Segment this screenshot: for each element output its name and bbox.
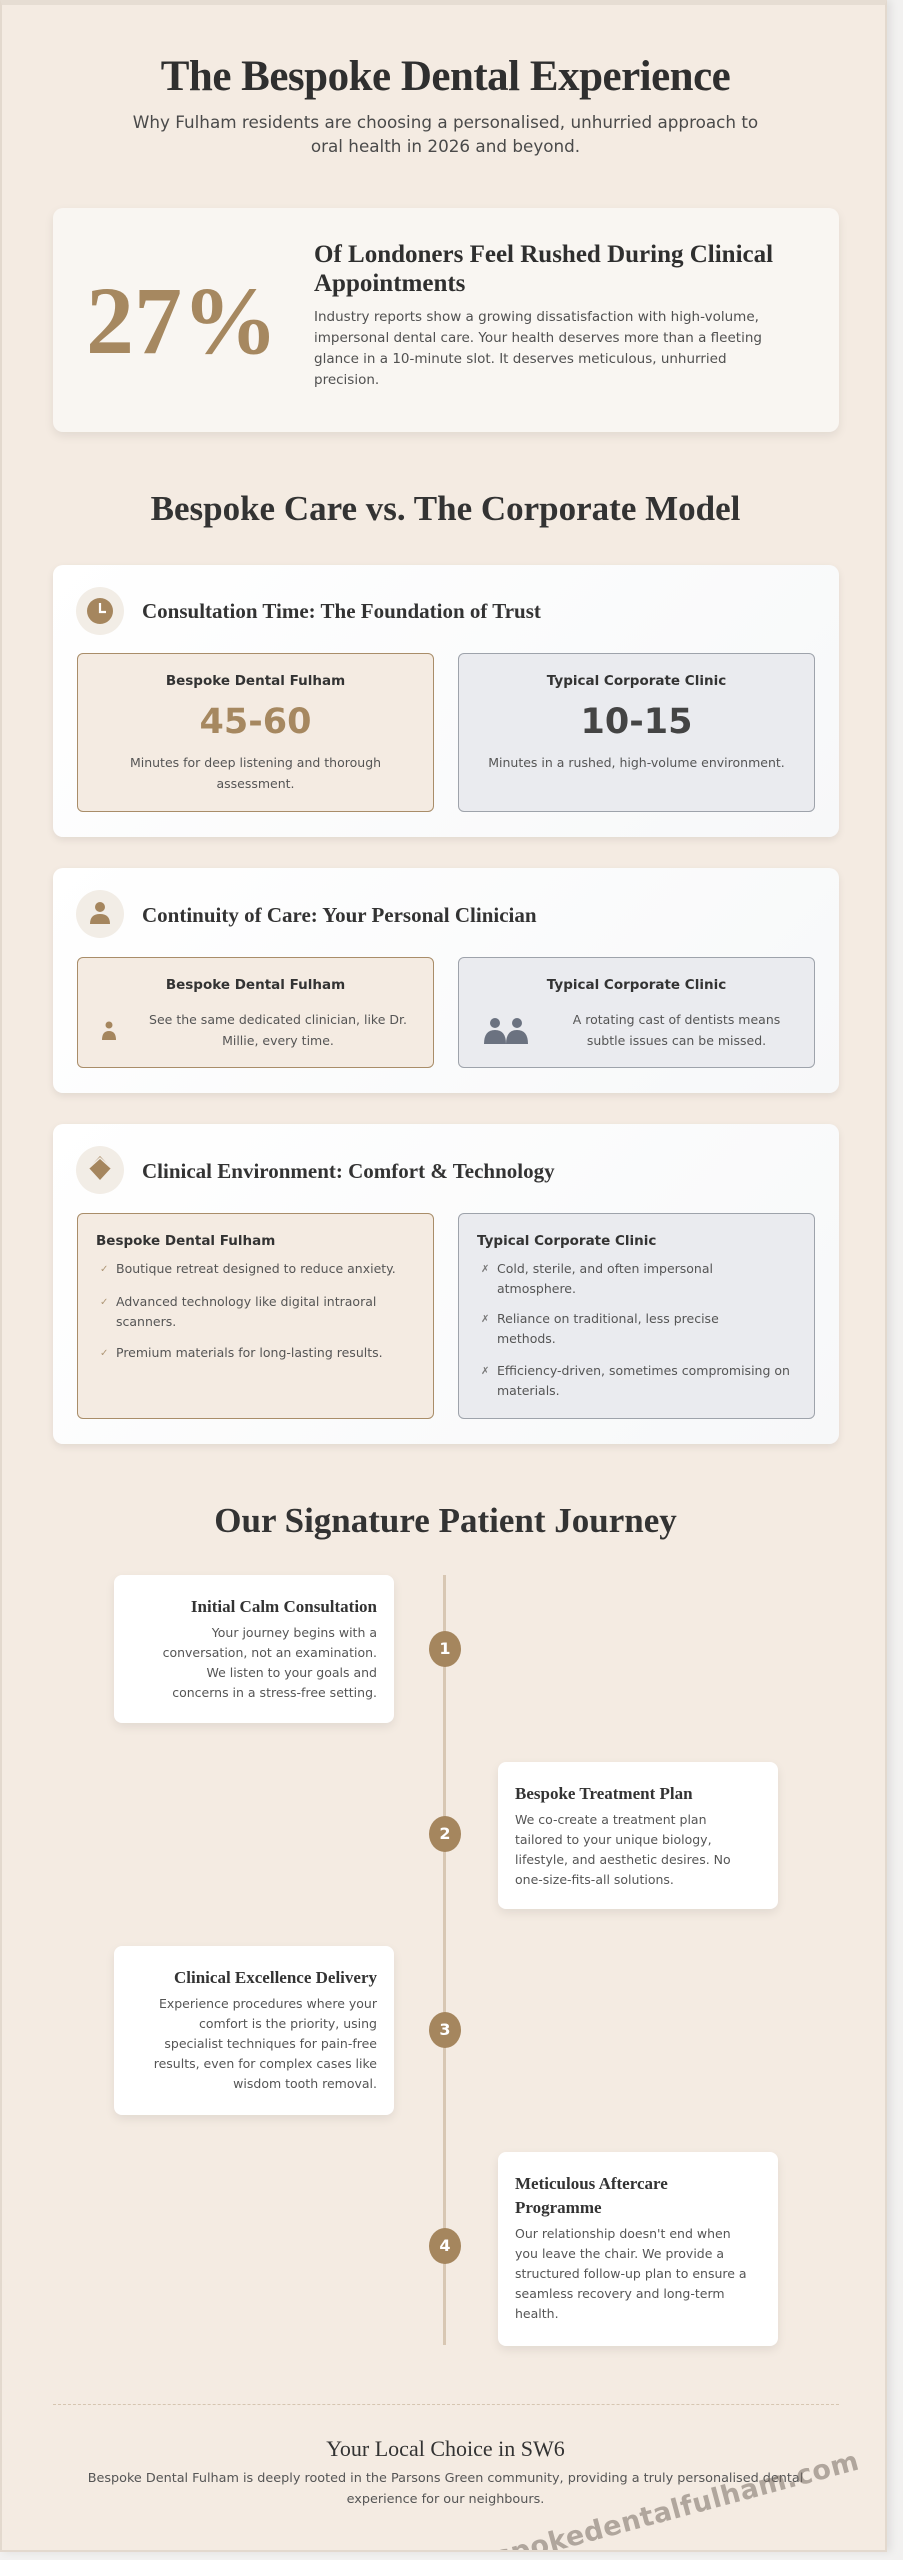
step 4: 4 xyxy=(439,2236,451,2255)
box: corporate list: ✗ xyxy=(481,1264,489,1275)
step 3: Clinical Excellence Delivery xyxy=(174,1968,377,1987)
box: corporate list: Cold, sterile, and often impersonal atmosphere. xyxy=(497,1261,713,1296)
box: corporate list: Efficiency-driven, sometimes compromising on materials. xyxy=(497,1363,790,1398)
step 2: We co-create a treatment plan tailored to your unique biology, lifestyle, and aesthetic desires. No one-size-fits-all solutions. xyxy=(515,1812,731,1887)
step 1 xyxy=(114,1575,461,1728)
box: bespoke list: Premium materials for long-lasting results. xyxy=(116,1345,383,1360)
footer heading: Your Local Choice in SW6 xyxy=(326,2436,565,2461)
stat card xyxy=(53,208,839,432)
panel heading: Continuity of Care: Your Personal Clinician xyxy=(142,903,537,927)
icon: person xyxy=(76,890,124,938)
box: corporate: A rotating cast of dentists means subtle issues can be missed. xyxy=(573,1012,780,1048)
stat number: 27% xyxy=(86,267,278,374)
step 1: Initial Calm Consultation xyxy=(191,1597,377,1616)
step 3: Experience procedures where your comfort is the priority, using specialist techniques for pain-free results, even for complex cases like wisdom tooth removal. xyxy=(154,1996,377,2091)
box: bespoke list: ✓ xyxy=(100,1348,108,1359)
box: bespoke: Bespoke Dental Fulham xyxy=(166,673,345,689)
box: bespoke: Minutes for deep listening and thorough assessment. xyxy=(130,755,381,791)
box: bespoke list: Bespoke Dental Fulham xyxy=(96,1233,275,1249)
box: corporate list: ✗ xyxy=(481,1366,489,1377)
step 3: 3 xyxy=(439,2020,451,2039)
box: corporate: 10-15 xyxy=(581,702,692,742)
box: corporate: Minutes in a rushed, high-volume environment. xyxy=(488,755,785,770)
step 2: Bespoke Treatment Plan xyxy=(515,1784,693,1803)
title: The Bespoke Dental Experience xyxy=(161,53,730,100)
box: corporate xyxy=(458,957,815,1068)
icon: single person xyxy=(102,1022,116,1040)
box: corporate list: Typical Corporate Clinic xyxy=(477,1233,656,1249)
panel: clinical environment xyxy=(53,1124,839,1444)
step 2: 2 xyxy=(439,1824,451,1843)
box: bespoke xyxy=(77,653,434,812)
box: bespoke: 45-60 xyxy=(200,702,311,742)
section heading: comparison: Bespoke Care vs. The Corporate Model xyxy=(151,489,740,528)
panel heading: Consultation Time: The Foundation of Trust xyxy=(142,599,541,623)
box: bespoke xyxy=(77,957,434,1068)
box: bespoke list: Boutique retreat designed to reduce anxiety. xyxy=(116,1261,396,1276)
step 4: Meticulous Aftercare Programme xyxy=(515,2174,668,2217)
box: bespoke list xyxy=(77,1213,434,1419)
step 4: Our relationship doesn't end when you leave the chair. We provide a structured follow-up plan to ensure a seamless recovery and long-term health. xyxy=(515,2226,747,2321)
panel heading: Clinical Environment: Comfort & Technology xyxy=(142,1159,555,1183)
step 4 xyxy=(429,2152,778,2350)
box: bespoke list: Advanced technology like digital intraoral scanners. xyxy=(116,1294,376,1329)
box: bespoke: Bespoke Dental Fulham xyxy=(166,977,345,993)
section heading: journey: Our Signature Patient Journey xyxy=(214,1501,677,1540)
box: corporate xyxy=(458,653,815,812)
footer text: Bespoke Dental Fulham is deeply rooted in the Parsons Green community, providing a truly personalised dental experience for our neighbours. xyxy=(88,2471,803,2507)
box: corporate list xyxy=(458,1213,815,1419)
box: corporate: Typical Corporate Clinic xyxy=(547,673,726,689)
box: bespoke list: ✓ xyxy=(100,1264,108,1275)
step 1: Your journey begins with a conversation, not an examination. We listen to your goals and concerns in a stress-free setting. xyxy=(163,1625,377,1700)
box: bespoke list: ✓ xyxy=(100,1297,108,1308)
icon: clock xyxy=(76,587,124,635)
box: corporate: Typical Corporate Clinic xyxy=(547,977,726,993)
box: corporate list: ✗ xyxy=(481,1314,489,1325)
panel: consultation time xyxy=(53,565,839,837)
box: corporate list: Reliance on traditional, less precise methods. xyxy=(497,1311,719,1346)
icon: group xyxy=(484,1018,528,1044)
stat heading: Of Londoners Feel Rushed During Clinical Appointments xyxy=(314,241,773,297)
step 3 xyxy=(114,1946,461,2120)
subtitle: Why Fulham residents are choosing a personalised, unhurried approach to oral health in 2026 and beyond. xyxy=(133,112,758,156)
icon: diamond xyxy=(76,1146,124,1194)
step 2 xyxy=(429,1762,778,1914)
box: bespoke: See the same dedicated clinician, like Dr. Millie, every time. xyxy=(149,1012,407,1048)
panel: continuity of care xyxy=(53,868,839,1093)
timeline xyxy=(114,1575,778,2350)
step 1: 1 xyxy=(439,1639,451,1658)
stat body: Industry reports show a growing dissatisfaction with high-volume, impersonal dental care. Your health deserves more than a fleeting glance in a 10-minute slot. It deserves meticulous, unhurried precision. xyxy=(314,309,762,388)
